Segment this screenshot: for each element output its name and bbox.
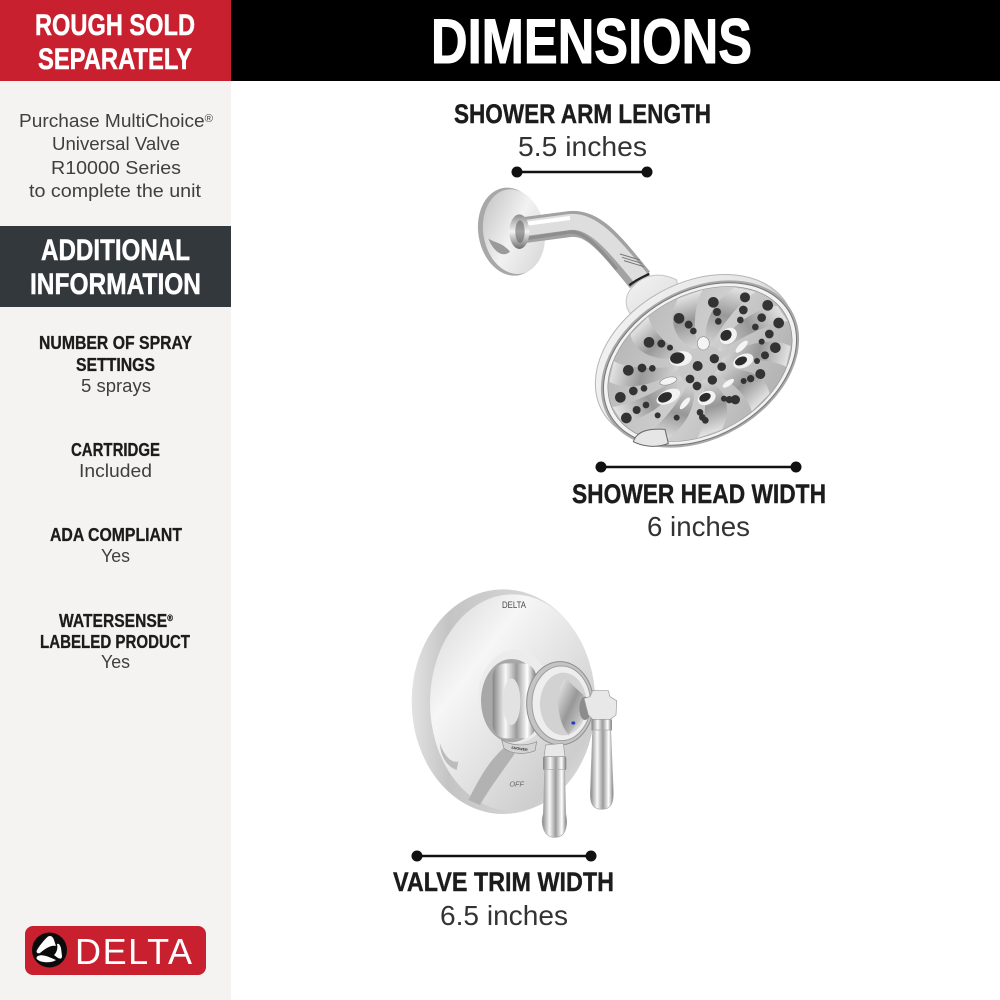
spec: ada compliant: ADA COMPLIANT <box>50 525 182 545</box>
spec: ada compliant: Yes <box>101 545 130 566</box>
label: valve trim width <box>393 850 614 931</box>
label: shower arm length: SHOWER ARM LENGTH <box>454 99 711 129</box>
text: purchase note: Purchase MultiChoice <box>19 110 199 131</box>
spec: cartridge: CARTRIDGE <box>71 440 160 460</box>
head rim <box>571 246 829 482</box>
text: purchase note: ® <box>205 113 213 125</box>
spec: number of spray settings: 5 sprays <box>81 375 151 396</box>
logo: delta: DELTA <box>75 931 192 972</box>
banner: additional information: ADDITIONAL <box>41 234 190 267</box>
text: purchase note <box>19 110 213 201</box>
banner: additional information <box>0 226 231 307</box>
front dial <box>527 662 593 745</box>
head rim highlight <box>574 250 826 478</box>
label: valve trim width: 6.5 inches <box>440 900 568 931</box>
spray nozzles <box>615 292 784 424</box>
spec: watersense labeled product: ® <box>167 613 173 623</box>
banner: rough sold separately: SEPARATELY <box>38 43 192 76</box>
spec: cartridge <box>71 440 160 481</box>
banner: rough sold separately: ROUGH SOLD <box>35 9 195 42</box>
spec: number of spray settings <box>39 333 192 396</box>
spec: watersense labeled product: Yes <box>101 651 130 672</box>
spec: cartridge: Included <box>79 460 152 481</box>
illustration: valve trim <box>412 589 617 837</box>
spec: watersense labeled product: LABELED PRODUCT <box>40 632 190 652</box>
label: shower arm length: 5.5 inches <box>518 131 647 162</box>
elongated centre openings <box>654 324 756 411</box>
text: purchase note: R10000 Series <box>51 157 181 178</box>
head dome <box>565 240 825 476</box>
spec: number of spray settings: NUMBER OF SPRAY <box>39 333 192 353</box>
spec: watersense labeled product <box>40 611 190 672</box>
spray selector tab <box>633 429 668 446</box>
escutcheon plate: DELTA <box>502 600 526 610</box>
banner: rough sold separately <box>0 0 231 81</box>
spec: watersense labeled product: WATERSENSE <box>59 611 184 631</box>
text: purchase note: to complete the unit <box>29 180 201 201</box>
label: valve trim width: VALVE TRIM WIDTH <box>393 867 614 897</box>
label: shower head width: SHOWER HEAD WIDTH <box>572 479 826 509</box>
panel: left sidebar <box>0 0 231 1000</box>
text: purchase note: Universal Valve <box>52 133 180 154</box>
front lever handle <box>542 743 567 837</box>
spec: ada compliant <box>50 525 182 566</box>
temperature hub: SHOWER <box>511 746 528 752</box>
title banner: dimensions <box>231 0 1000 81</box>
escutcheon plate: OFF <box>509 780 525 789</box>
label: shower head width <box>572 462 826 542</box>
illustration: shower head and arm <box>471 182 829 482</box>
escutcheon plate <box>412 589 595 814</box>
title banner: dimensions: DIMENSIONS <box>431 7 752 77</box>
rear lever handle <box>584 691 617 809</box>
spec: number of spray settings: SETTINGS <box>76 355 155 375</box>
temperature hub <box>478 650 552 753</box>
label: shower head width: 6 inches <box>647 511 750 542</box>
wall flange <box>471 182 552 281</box>
logo: delta <box>25 926 206 975</box>
banner: additional information: INFORMATION <box>30 268 201 301</box>
spray face <box>580 254 820 474</box>
shower arm <box>509 214 644 280</box>
label: shower arm length <box>454 99 711 178</box>
